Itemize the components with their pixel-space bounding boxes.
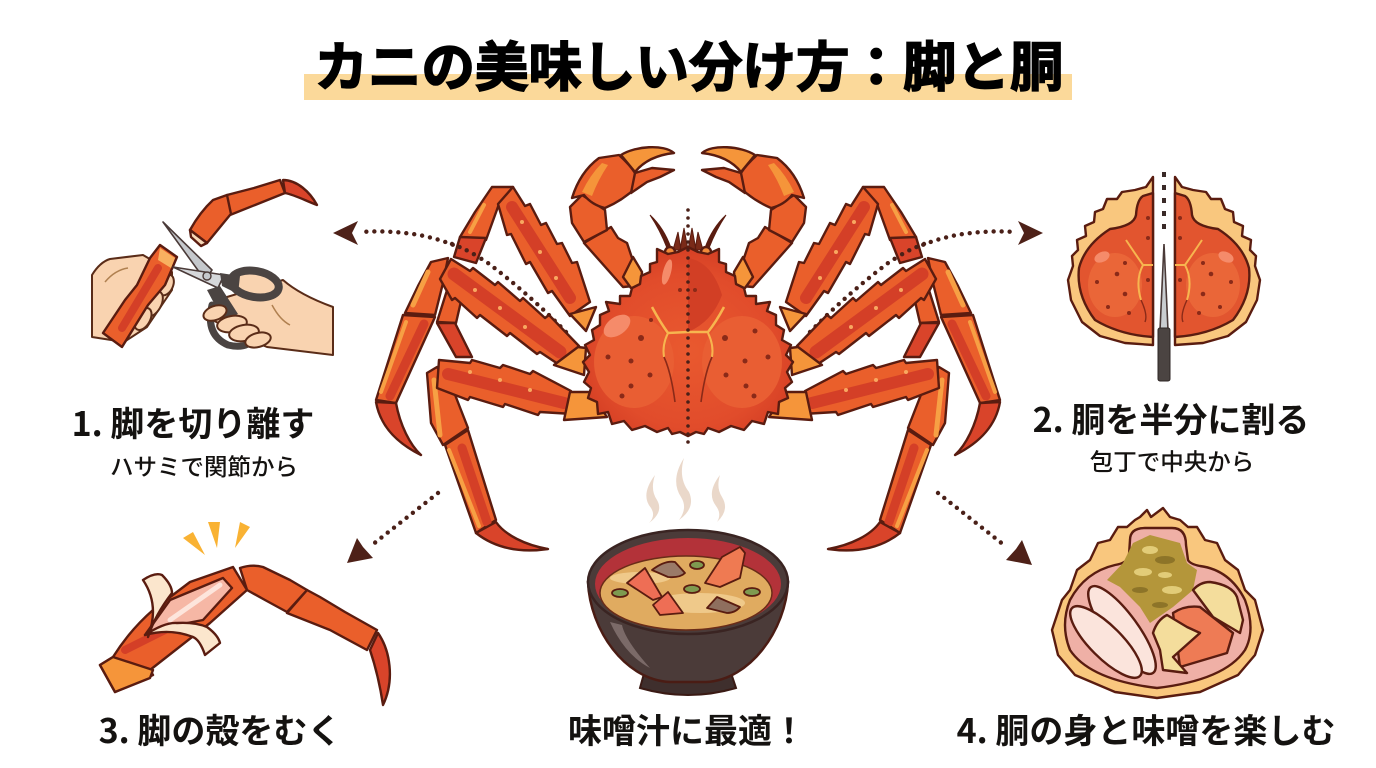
- claw: arm and pincer: [570, 147, 674, 290]
- step 2 caption: 包丁で中央から: [1090, 443, 1254, 477]
- crab illustration: [376, 147, 1000, 550]
- arrow: crab to step 3: [347, 493, 438, 563]
- left hand with leg: [92, 245, 177, 347]
- crab miso: [1107, 535, 1197, 623]
- cut line: crab centre: [686, 210, 690, 446]
- scissors and right hand: [163, 222, 333, 355]
- title: カニの美味しい分け方：脚と胴: [314, 25, 1064, 102]
- arrow: crab body to step 2: [810, 221, 1043, 332]
- steam: [646, 458, 725, 523]
- step 4 illustration: shell with meat and miso: [1052, 508, 1263, 698]
- arrow: crab to step 4: [938, 493, 1032, 565]
- shell halves: [1068, 177, 1153, 345]
- leg 2: [376, 258, 586, 455]
- leg 3: [427, 360, 607, 550]
- step 1 caption: ハサミで関節から: [110, 448, 298, 482]
- antenna: [650, 215, 688, 257]
- shine marks: [183, 522, 250, 555]
- step 3 illustration: peeled leg: [100, 522, 390, 705]
- step 1 label: 1. 脚を切り離す: [72, 397, 314, 446]
- severed leg piece: [190, 180, 317, 246]
- step 2 label: 2. 胴を半分に割る: [1033, 393, 1309, 442]
- body meat: [1153, 582, 1243, 673]
- crab body shell: [583, 247, 793, 436]
- arrow dots over right leg: [896, 244, 924, 258]
- knife: [1158, 172, 1170, 381]
- step 3 label: 3. 脚の殻をむく: [99, 704, 341, 753]
- soup ingredients: [612, 547, 760, 615]
- arrow dots over left leg: [452, 244, 480, 258]
- step 2 illustration: halved shell and knife: [1068, 172, 1260, 381]
- arrow: crab leg to step 1: [333, 221, 566, 332]
- leg 1: [437, 187, 596, 357]
- step 1 illustration: cutting leg with scissors: [92, 180, 333, 355]
- exposed meat and peeled shell: [143, 574, 232, 655]
- leg meat: [1061, 578, 1166, 687]
- bowl label: 味噌汁に最適！: [568, 704, 806, 753]
- miso soup bowl: [588, 530, 788, 695]
- leg segments: [100, 566, 390, 705]
- step 4 label: 4. 胴の身と味噌を楽しむ: [957, 704, 1335, 753]
